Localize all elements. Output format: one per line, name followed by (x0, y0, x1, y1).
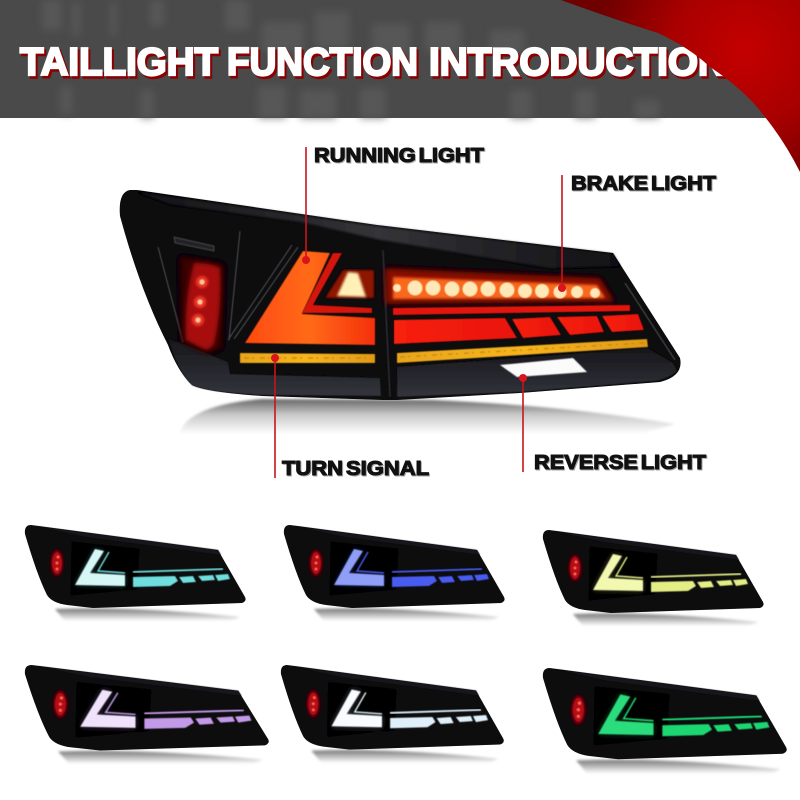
variant: ice blue lamp (25, 525, 246, 621)
variant: green lamp (543, 668, 787, 774)
callout: turn signal (271, 354, 430, 481)
brake light LEDs (393, 277, 605, 299)
handle detail (174, 237, 214, 251)
title: TAILLIGHT (22, 44, 220, 86)
callout: brake light: BRAKE LIGHT (571, 172, 717, 195)
left turn signal strip (240, 353, 375, 363)
callout: turn signal: TURN SIGNAL (283, 458, 430, 481)
variant: white lamp (281, 665, 504, 763)
right running glow (385, 268, 615, 304)
right turn signal strip (397, 339, 648, 363)
trim lines (158, 231, 675, 397)
callout: turn signal: TURN SIGNAL (282, 457, 429, 480)
callout: brake light (558, 172, 718, 292)
header grey background (0, 0, 800, 118)
panel: header banner (0, 0, 800, 172)
lower grey trim right (397, 348, 677, 397)
red L outline (302, 253, 372, 313)
title (20, 41, 728, 86)
lamp reflection (180, 399, 675, 434)
lower grey trim left (168, 338, 381, 396)
title: FUNCTION (229, 44, 420, 86)
reverse light (500, 358, 587, 377)
title: INTRODUCTION (429, 41, 726, 84)
variant: purple lamp (25, 665, 269, 764)
red tail blocks (394, 314, 644, 344)
lamp body (120, 190, 681, 400)
red thin strip (393, 305, 630, 315)
variant: blue lamp (284, 525, 505, 621)
title: INTRODUCTION (431, 44, 728, 86)
callout: reverse light: REVERSE LIGHT (534, 451, 706, 474)
top glossy band (137, 192, 620, 268)
L-shaped running light (245, 251, 375, 345)
callout: running light (302, 144, 485, 264)
side red lamp (180, 256, 224, 354)
title: FUNCTION (227, 41, 418, 84)
variant: yellow lamp (543, 530, 764, 626)
title: TAILLIGHT (20, 41, 218, 84)
red corner swoosh (561, 0, 800, 172)
callout: running light: RUNNING LIGHT (315, 145, 485, 168)
callout: reverse light: REVERSE LIGHT (535, 452, 707, 475)
callout: brake light: BRAKE LIGHT (572, 173, 718, 196)
callout: running light: RUNNING LIGHT (314, 144, 484, 167)
inner red lamp (325, 270, 374, 298)
callout: reverse light (519, 374, 707, 475)
panel: main taillight diagram (120, 190, 681, 434)
